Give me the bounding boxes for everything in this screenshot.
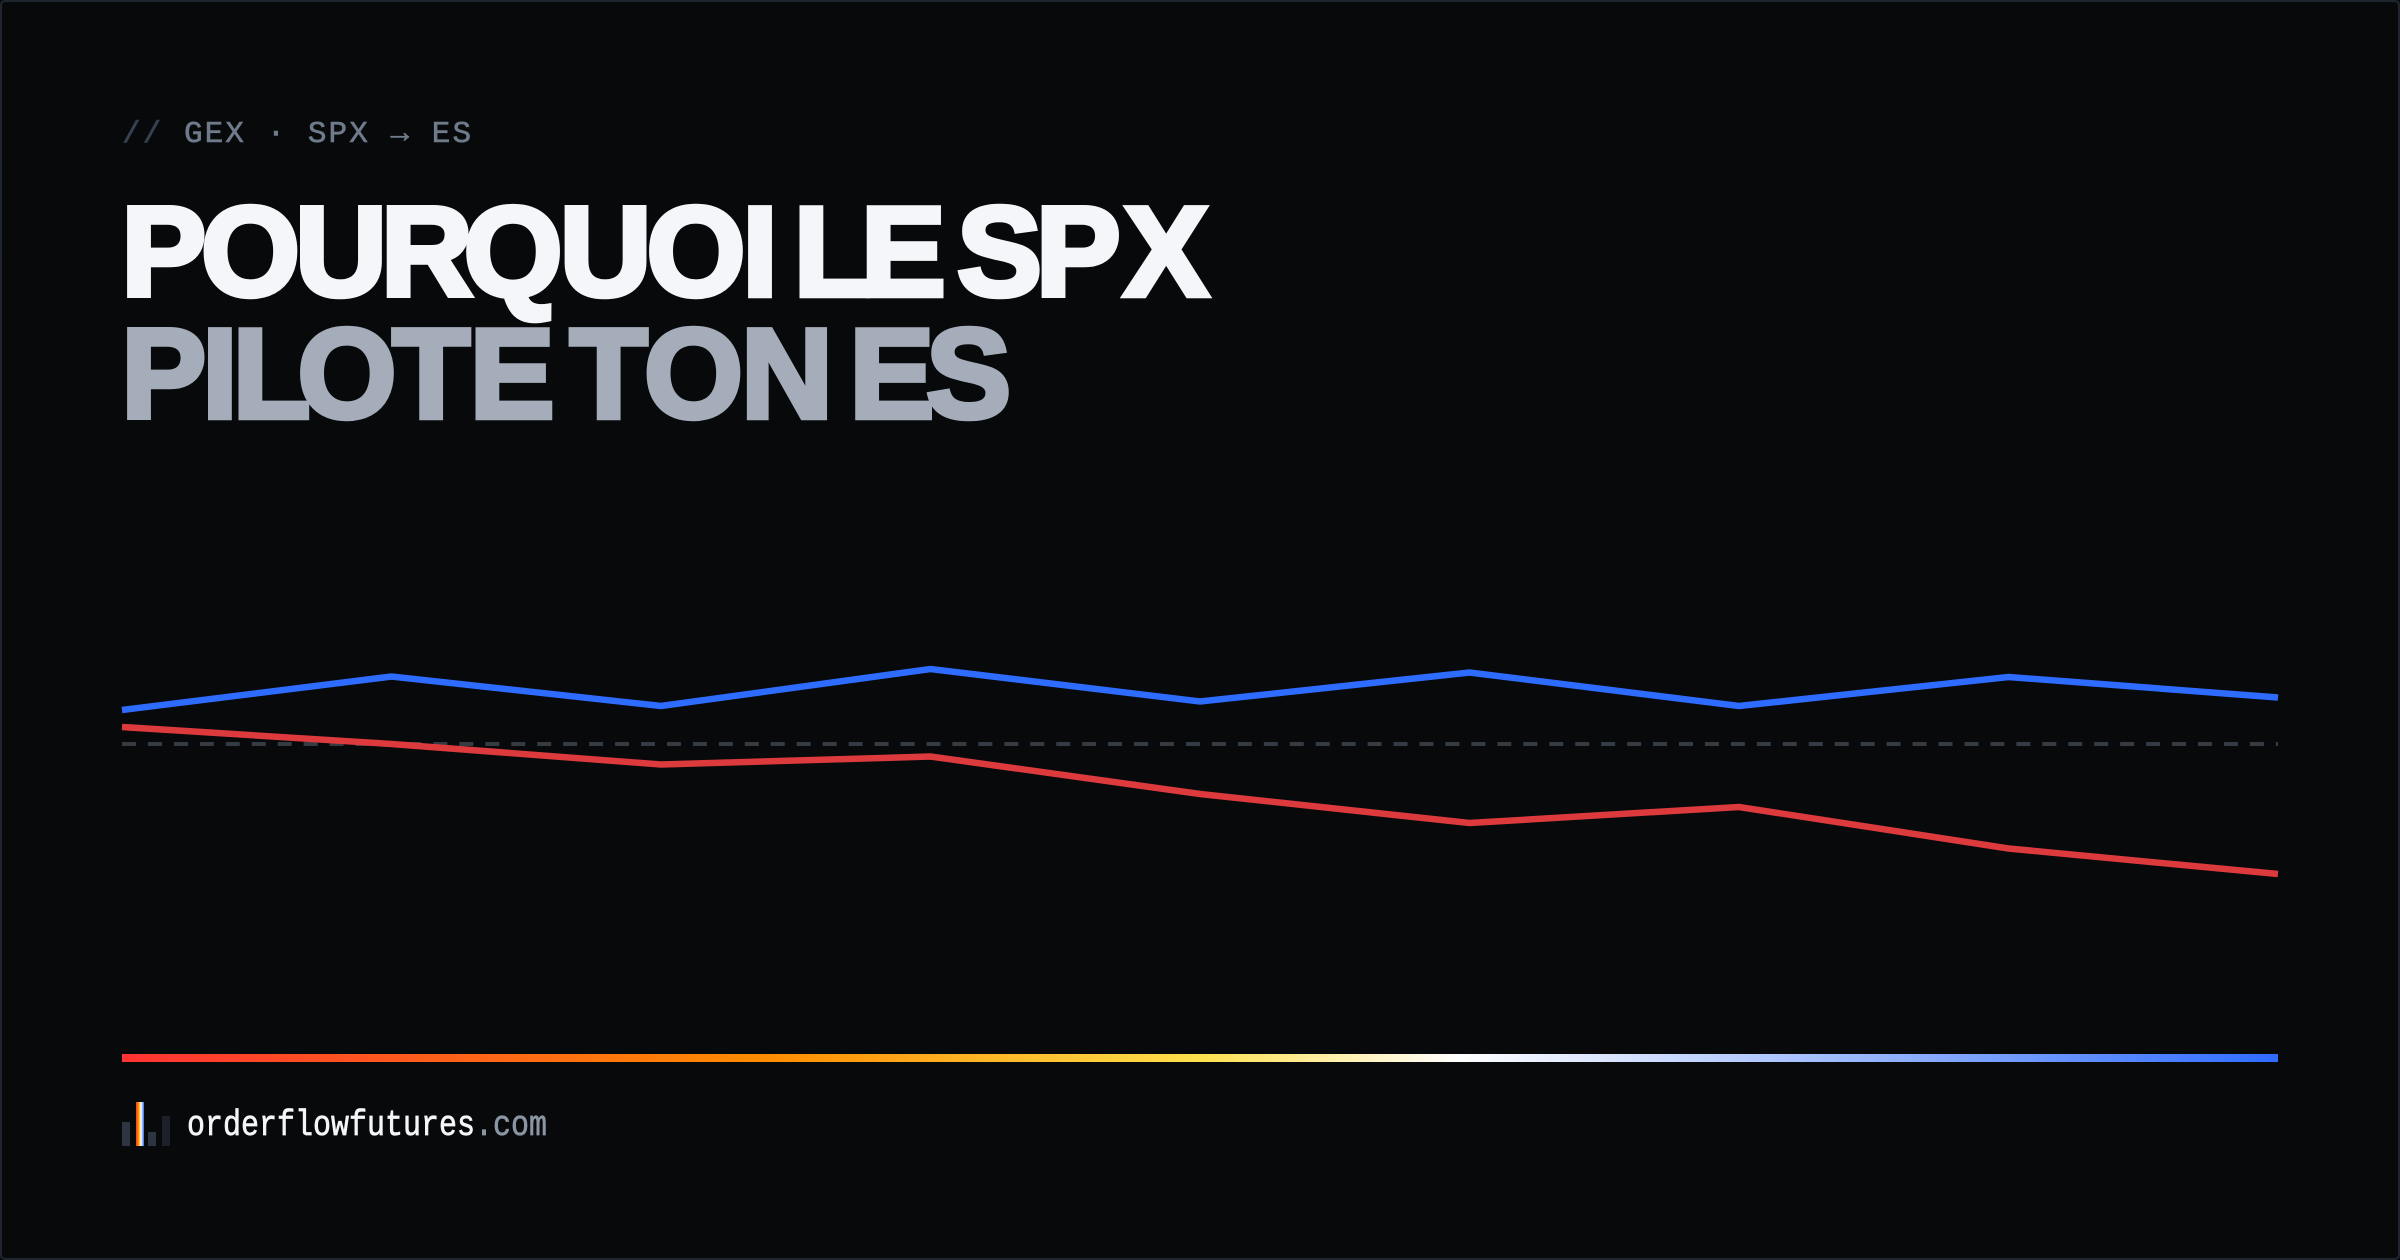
title line 2: PILOTE TON ES (121, 302, 1011, 444)
title (121, 180, 1209, 444)
logo icon: bars (122, 1102, 170, 1146)
gradient bar (122, 1054, 2278, 1062)
line chart (122, 669, 2278, 874)
zero baseline (122, 742, 2278, 746)
title line 1: POURQUOI LE SPX (121, 180, 1209, 322)
blue series: SPX (122, 669, 2278, 710)
red series: ES (122, 727, 2278, 874)
brand text: orderflowfutures.com (187, 1105, 547, 1146)
eyebrow label: // GEX · SPX → ES (122, 117, 473, 152)
